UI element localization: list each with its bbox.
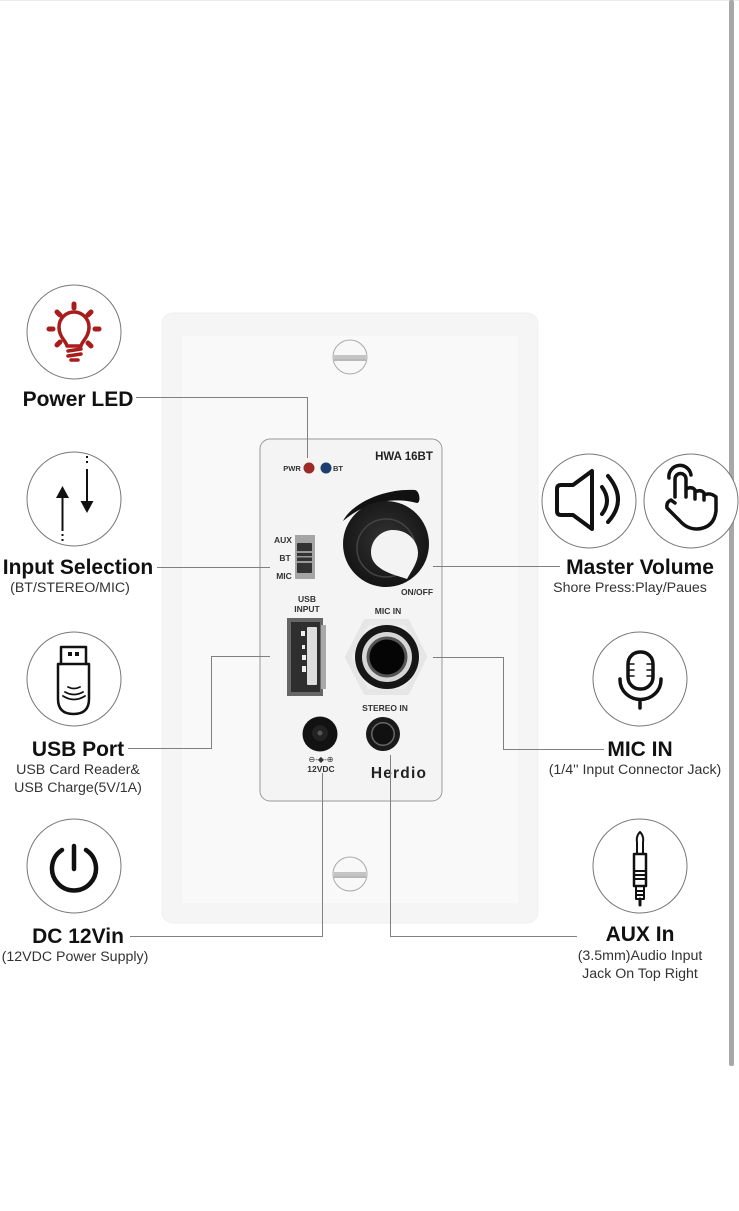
top screw	[333, 340, 367, 374]
leader line: AUX In	[390, 755, 577, 936]
stereo in jack: STEREO IN	[362, 703, 408, 713]
mic in jack	[348, 606, 424, 692]
icon: light bulb	[27, 285, 121, 379]
mic in jack: MIC IN	[375, 606, 401, 616]
feature: USB Port	[14, 632, 142, 796]
leader line: USB Port	[128, 656, 270, 748]
icon: power symbol	[27, 819, 121, 913]
brand name: Herdio	[371, 765, 427, 782]
feature: DC 12Vin	[2, 819, 148, 965]
icon: up and down arrows	[27, 452, 121, 546]
feature: USB Port: USB Charge(5V/1A)	[14, 780, 142, 796]
feature: AUX In: Jack On Top Right	[582, 966, 698, 982]
icon: USB stick	[27, 632, 121, 726]
input selector switch: MIC	[276, 571, 292, 581]
description: (12VDC Power Supply)	[2, 949, 148, 965]
heading: AUX In	[606, 923, 674, 946]
description: (1/4'' Input Connector Jack)	[549, 762, 721, 778]
model name: HWA 16BT	[375, 451, 433, 463]
description: USB Card Reader&	[16, 762, 140, 778]
input selector switch: BT	[279, 553, 291, 563]
icon: microphone	[593, 632, 687, 726]
input selector switch	[274, 535, 315, 581]
USB input port: USB	[298, 594, 316, 604]
input selector switch: AUX	[274, 535, 292, 545]
LED indicators: PWR	[283, 464, 301, 473]
leader line: MIC IN	[433, 658, 604, 750]
heading: Master Volume	[566, 556, 714, 579]
leader line: Power LED	[136, 398, 308, 458]
heading: Power LED	[23, 388, 133, 411]
description: Shore Press:Play/Paues	[553, 580, 707, 596]
feature: AUX In	[578, 819, 702, 982]
USB input port: INPUT	[294, 604, 321, 614]
volume knob: ON/OFF	[401, 587, 433, 597]
heading: MIC IN	[607, 738, 673, 761]
heading: USB Port	[32, 738, 124, 761]
icon: touch hand	[644, 454, 738, 548]
description: (BT/STEREO/MIC)	[10, 580, 130, 596]
volume knob	[343, 490, 433, 597]
DC power jack: 12VDC	[307, 764, 335, 774]
feature: Power LED	[23, 285, 133, 411]
heading: DC 12Vin	[32, 925, 124, 948]
leader line: DC 12Vin	[130, 773, 322, 936]
feature: MIC IN	[549, 632, 721, 778]
LED indicators	[283, 462, 343, 474]
leader line: Master Volume	[433, 566, 560, 568]
LED indicators: BT	[333, 464, 343, 473]
leader line: Input Selection	[157, 566, 270, 568]
feature: Input Selection	[3, 452, 153, 596]
stereo in jack	[362, 703, 408, 751]
wall plate	[162, 313, 538, 923]
DC power jack: ⊖-◆-⊕	[309, 755, 333, 764]
bottom screw	[333, 857, 367, 891]
icon: audio jack plug	[593, 819, 687, 913]
icon: speaker	[542, 454, 636, 548]
control panel	[260, 439, 442, 801]
USB input port	[287, 594, 326, 696]
feature: Master Volume	[542, 454, 738, 596]
heading: Input Selection	[3, 556, 153, 579]
scrollbar	[729, 0, 734, 1066]
DC power jack	[302, 716, 338, 774]
description: (3.5mm)Audio Input	[578, 948, 702, 964]
